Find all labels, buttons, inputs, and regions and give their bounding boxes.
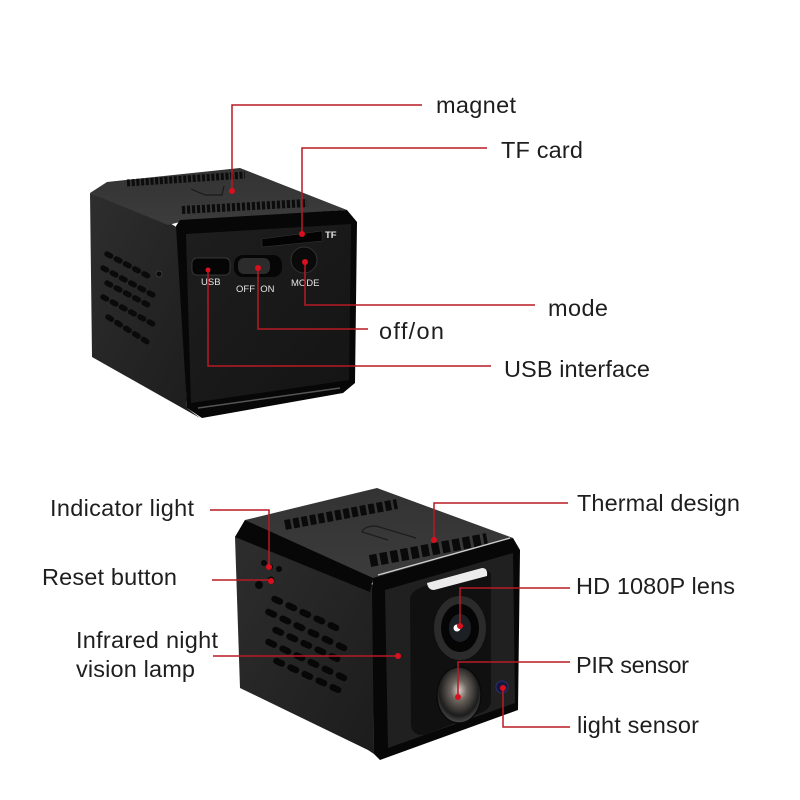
HD lens bbox=[434, 596, 486, 660]
front panel inset bbox=[186, 224, 351, 403]
label: Infrared night vision lamp: vision lamp bbox=[76, 656, 195, 682]
label: Reset button: Reset button bbox=[42, 564, 177, 590]
callout: Thermal design bbox=[431, 503, 568, 543]
OFF ON label: OFF ON bbox=[236, 284, 275, 295]
label: mode: mode bbox=[548, 295, 608, 321]
lens module housing bbox=[410, 570, 491, 735]
callout: Infrared lamp bbox=[213, 653, 401, 659]
callout lines and dots bbox=[206, 105, 570, 727]
mode button bbox=[291, 247, 317, 273]
magnet outline bbox=[362, 526, 416, 540]
top vents bbox=[285, 504, 487, 561]
callout: light sensor bbox=[500, 685, 570, 727]
USB port bbox=[192, 258, 230, 275]
label: off/on: off/on bbox=[379, 318, 444, 344]
MODE label: MODE bbox=[291, 278, 320, 289]
top bevel bbox=[235, 520, 373, 592]
USB label: USB bbox=[201, 277, 221, 288]
callout: PIR sensor bbox=[455, 662, 570, 700]
callout: USB interface bbox=[206, 268, 491, 366]
bevel highlight bbox=[378, 538, 510, 575]
camera: back view bbox=[90, 168, 357, 418]
callout: HD lens bbox=[457, 588, 570, 629]
speaker holes bbox=[103, 254, 153, 343]
callout: TF card bbox=[299, 148, 487, 237]
side screw bbox=[156, 271, 162, 277]
TF card slot bbox=[262, 231, 322, 247]
camera body: top face bbox=[90, 168, 347, 225]
housing gloss strip bbox=[427, 568, 487, 590]
front panel inset bbox=[385, 553, 515, 748]
callout: Reset button bbox=[212, 578, 274, 584]
switch knob bbox=[238, 258, 270, 274]
power switch bbox=[234, 255, 282, 277]
light sensor bbox=[496, 681, 508, 693]
label: TF card: TF card bbox=[501, 137, 583, 163]
label: PIR sensor: PIR sensor bbox=[576, 652, 689, 678]
speaker holes bbox=[268, 599, 344, 690]
camera body: top face bbox=[245, 488, 513, 584]
label: Infrared night vision lamp bbox=[76, 627, 218, 682]
label: USB interface: USB interface bbox=[504, 356, 650, 382]
camera body: front face bbox=[176, 210, 357, 418]
camera body: front face bbox=[372, 538, 520, 760]
label: HD 1080P lens: HD 1080P lens bbox=[576, 573, 735, 599]
top vents bbox=[127, 175, 307, 210]
TF label: TF bbox=[325, 230, 337, 241]
magnet outline bbox=[191, 186, 224, 195]
PIR sensor bbox=[437, 667, 481, 723]
camera body: left side bbox=[90, 193, 200, 418]
callout: Indicator light bbox=[210, 510, 272, 570]
indicator holes bbox=[255, 560, 282, 589]
callout: off/on bbox=[255, 265, 368, 329]
label: Thermal design: Thermal design bbox=[577, 490, 740, 516]
bottom bevel highlight bbox=[198, 388, 340, 408]
camera: front view bbox=[235, 488, 520, 760]
label: Infrared night vision lamp: Infrared night bbox=[76, 627, 218, 653]
callout: mode bbox=[302, 259, 535, 305]
camera body: side face bbox=[235, 520, 374, 754]
label: Indicator light: Indicator light bbox=[50, 495, 194, 521]
callout: magnet bbox=[229, 105, 422, 194]
label: light sensor: light sensor bbox=[577, 712, 699, 738]
label: magnet: magnet bbox=[436, 92, 516, 118]
